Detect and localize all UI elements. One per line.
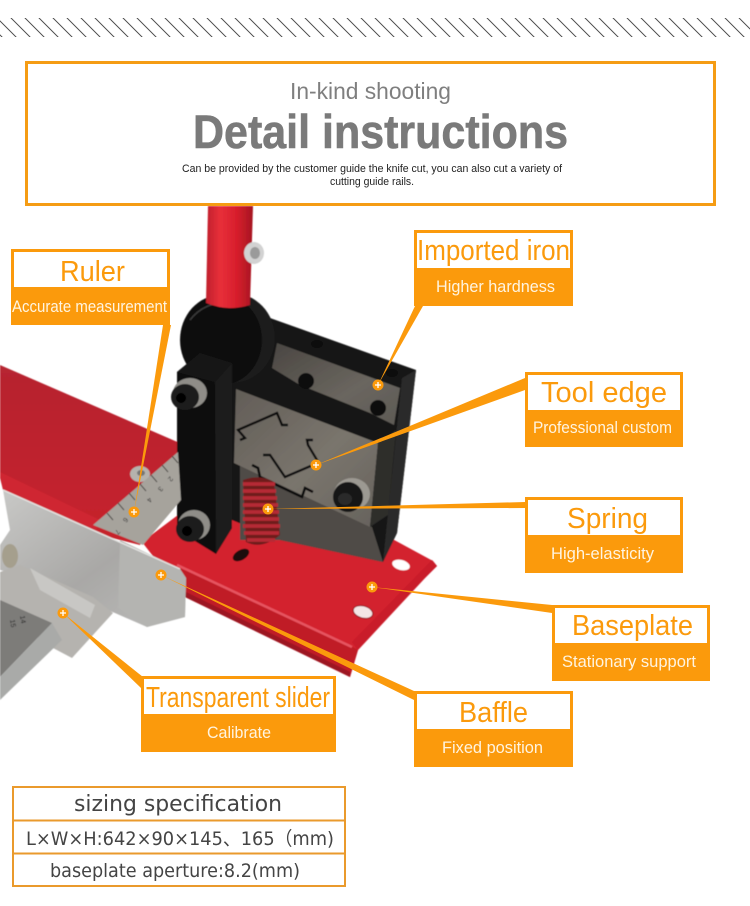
callout: transparent slider: Calibrate (207, 723, 271, 742)
callout: baseplate: Stationary support (562, 652, 696, 671)
leader: imported iron (378, 306, 423, 385)
marker: baffle (156, 570, 166, 580)
black disc (180, 293, 275, 385)
red handle (206, 206, 264, 308)
measuring ruler: 3 (156, 485, 164, 492)
description text: Can be provided by the customer guide the knife cut, you can also cut a variety of (182, 163, 563, 175)
measuring ruler: 4 (145, 496, 153, 503)
title panel (26, 62, 714, 204)
title eyebrow: In-kind shooting (290, 78, 451, 104)
callout: baseplate (552, 605, 710, 681)
decorative hatch band (0, 18, 750, 37)
callout: transparent slider (141, 676, 336, 752)
steel scale (0, 600, 62, 700)
marker: baseplate (366, 582, 378, 592)
callout: baffle: Baffle (459, 697, 528, 729)
aluminium baffle (0, 490, 186, 627)
black arm (177, 353, 232, 554)
blade plate with cutting slots (234, 389, 396, 527)
red spring (243, 477, 280, 545)
callout: tool edge (525, 372, 683, 447)
arm top bolt (171, 378, 207, 410)
aperture row: baseplate aperture:8.2(mm) (50, 860, 300, 882)
blade plate bolt (333, 478, 370, 512)
base plate (142, 480, 437, 677)
main heading: Detail instructions (193, 105, 568, 158)
callout: imported iron: Imported iron (417, 235, 570, 267)
measuring ruler: 7 (113, 528, 121, 535)
leader: spring (268, 502, 525, 509)
back plate bolt holes (298, 340, 398, 416)
leader: baffle (161, 575, 414, 700)
leader: transparent slider (63, 613, 143, 688)
arm bottom bolt (176, 510, 210, 542)
marker: ruler (128, 506, 140, 518)
hex nut on rail (130, 466, 150, 482)
callout: ruler: Accurate measurement (12, 297, 167, 316)
steel scale: 14 (18, 615, 26, 624)
leader: baseplate (372, 587, 552, 613)
sizing specification table (13, 787, 345, 886)
table heading: sizing specification (74, 792, 282, 817)
leader: ruler (134, 325, 171, 512)
callout: baffle (414, 691, 573, 767)
callout: baffle: Fixed position (442, 738, 543, 757)
callout: tool edge: Tool edge (541, 377, 667, 409)
marker: imported iron (372, 380, 384, 390)
callout: ruler: Ruler (60, 256, 125, 288)
callout: spring (525, 497, 683, 573)
back plate (232, 318, 416, 562)
callout: baseplate: Baseplate (572, 610, 693, 642)
transparent slider (0, 565, 113, 658)
steel scale: 15 (8, 619, 16, 628)
callout: imported iron: Higher hardness (436, 277, 555, 296)
product photo: guide rail cutter (0, 206, 437, 700)
callout: ruler (11, 249, 170, 325)
measuring ruler: 6 (121, 516, 129, 523)
measuring ruler (93, 452, 181, 545)
callout: transparent slider: Transparent slider (146, 682, 330, 714)
red rail (0, 365, 182, 545)
callout: tool edge: Professional custom (533, 418, 672, 437)
base plate holes (231, 546, 411, 620)
callout: spring: Spring (567, 503, 648, 535)
description text (182, 163, 563, 188)
thumb screw (2, 544, 18, 568)
dimensions row: L×W×H:642×90×145、165（mm) (26, 828, 334, 850)
callout: spring: High-elasticity (551, 544, 654, 563)
description text: cutting guide rails. (330, 176, 414, 188)
callout: imported iron (414, 230, 573, 306)
marker: transparent slider (58, 608, 68, 618)
marker: tool edge (310, 460, 322, 470)
leader: tool edge (316, 378, 525, 465)
measuring ruler: 2 (166, 475, 174, 482)
marker: spring (262, 504, 274, 514)
